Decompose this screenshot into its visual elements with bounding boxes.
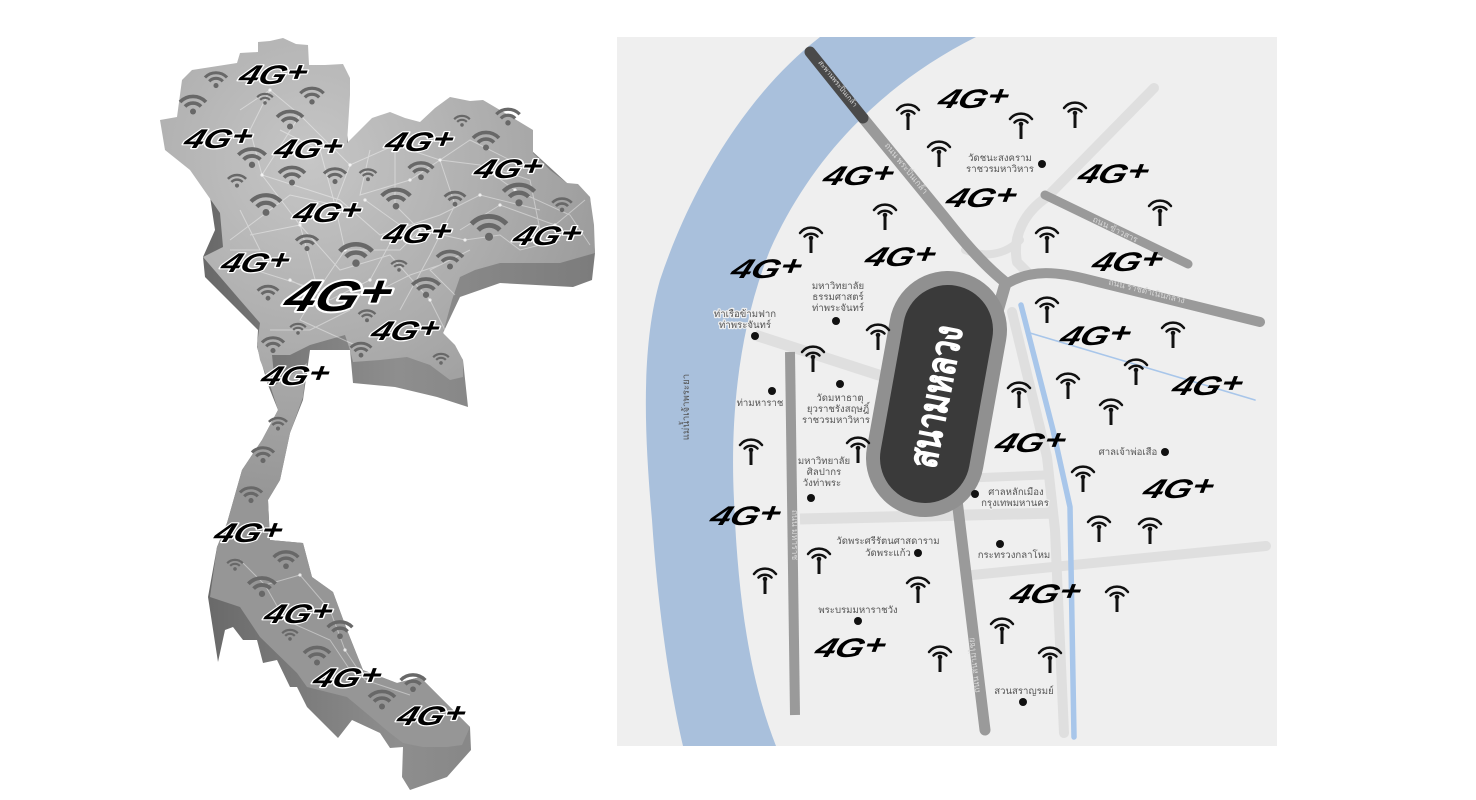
- 4G+ logos on street map: 4G: [706, 500, 765, 531]
- place labels: ศิลปากร: [807, 467, 841, 478]
- field label: สนามหลวง: [901, 322, 972, 471]
- 4G+ logos on street map: +: [1039, 424, 1072, 455]
- 4G+ logos on street map: 4G: [727, 253, 786, 284]
- 4G+ logos on map: +: [428, 124, 460, 154]
- 4G+ logos on map: 4G: [309, 663, 366, 693]
- panel: Sanam Luang street map: [617, 37, 1277, 746]
- 4G+ logos on street map: 4G: [934, 83, 993, 114]
- 4G+ logos on map: +: [282, 57, 314, 87]
- place labels: ราชวรมหาวิหาร: [802, 415, 870, 426]
- 4G+ logos on map: 4G: [393, 701, 450, 731]
- 4G+ logos on street map: +: [1136, 243, 1169, 274]
- 4G+ logos on street map: +: [982, 80, 1015, 111]
- 4G+ logos on street map: +: [1122, 155, 1155, 186]
- 4G+ logos on street map: 4G: [1139, 473, 1198, 504]
- 4G+ logos on street map: +: [1187, 470, 1220, 501]
- Sanam Luang field: [925, 330, 948, 458]
- 4G+ logos on map: +: [356, 660, 388, 690]
- minor roads: [755, 88, 1266, 733]
- 4G+ logos on street map: +: [775, 250, 808, 281]
- road labels: ถนน ข้าวสาร: [1091, 214, 1140, 245]
- road labels: ถนน พระปิ่นเกล้า: [883, 140, 931, 196]
- place labels: ศาลเจ้าพ่อเสือ: [1099, 446, 1157, 458]
- Chao Phraya river: [646, 37, 976, 746]
- wifi icons on map: [180, 73, 572, 709]
- 4G+ logos on map: +: [440, 698, 472, 728]
- 4G+ logos on map: 4G: [289, 198, 346, 228]
- 4G+ logos on map: +: [414, 313, 446, 343]
- 4G+ logos on map: +: [336, 195, 368, 225]
- place labels: มหาวิทยาลัย: [812, 281, 864, 292]
- 4G+ logos on street map: 4G: [811, 632, 870, 663]
- place labels: วัดชนะสงคราม: [968, 153, 1032, 164]
- place labels: สวนสราญรมย์: [994, 685, 1054, 697]
- 4G+ logos on street map: 4G: [819, 160, 878, 191]
- place labels: ธรรมศาสตร์: [812, 291, 864, 303]
- 4G+ logos on street map: +: [1216, 367, 1249, 398]
- 4G+ logos on map: +: [264, 245, 296, 275]
- panel: Thailand 3D map: [160, 38, 595, 790]
- antenna icons: [740, 103, 1184, 673]
- 4G+ logos on map: 4G: [235, 60, 292, 90]
- place labels: วัดมหาธาตุ: [816, 393, 864, 404]
- place labels: ยุวราชรังสฤษฎิ์: [807, 401, 871, 415]
- place labels: ท่าพระจันทร์: [719, 319, 771, 331]
- place labels: กระทรวงกลาโหม: [978, 549, 1050, 561]
- 4G+ logos on map: +: [257, 515, 289, 545]
- 4G+ logos on map: 4G: [470, 154, 527, 184]
- place labels: วัดพระแก้ว: [865, 548, 911, 559]
- 4G+ logos on map: +: [426, 216, 458, 246]
- road labels: ถนน ราชดำเนินกลาง: [1108, 277, 1186, 305]
- stadium outer ring: [925, 330, 948, 458]
- place labels: พระบรมมหาราชวัง: [818, 605, 898, 616]
- place labels: ท่าเรือข้ามฟาก: [714, 308, 776, 320]
- 4G+ logos on street map: 4G: [1168, 370, 1227, 401]
- 4G+ logos on map: 4G: [379, 219, 436, 249]
- road labels: [790, 58, 1186, 693]
- 4G+ logos on map: +: [556, 218, 588, 248]
- road labels: ถนน ราชดำเนินใน: [968, 389, 990, 459]
- 4G+ logos on map: 4G: [180, 124, 237, 154]
- road labels: สะพานพระปิ่นเกล้า: [816, 58, 860, 109]
- 4G+ logos on street map: +: [859, 629, 892, 660]
- location dots: [751, 160, 1169, 706]
- 4G+ logos on map: 4G: [381, 127, 438, 157]
- 4G+ logos on map: 4G: [260, 599, 317, 629]
- place labels: กรุงเทพมหานคร: [981, 498, 1049, 509]
- 4G+ logos on map: [179, 57, 588, 731]
- 4G+ logos on map: 4G: [257, 361, 314, 391]
- 4G+ logos on map: +: [227, 121, 259, 151]
- Pinklao bridge: [810, 52, 863, 118]
- 4G+ logos on map: 4G: [278, 272, 368, 320]
- place labels: วังท่าพระ: [803, 478, 841, 489]
- 4G+ logos on street map: +: [990, 179, 1023, 210]
- 4G+ logos on street map: 4G: [942, 182, 1001, 213]
- place labels: ศาลหลักเมือง: [988, 486, 1044, 498]
- map side walls: [200, 80, 595, 790]
- 4G+ logos on street map: [705, 80, 1249, 663]
- 4G+ logos on street map: +: [867, 157, 900, 188]
- 4G+ logos on street map: +: [1104, 317, 1137, 348]
- 4G+ logos on map: +: [304, 358, 336, 388]
- 4G+ logos on street map: 4G: [861, 241, 920, 272]
- 4G+ logos on street map: +: [1054, 575, 1087, 606]
- place labels: วัดพระศรีรัตนศาสดาราม: [836, 535, 940, 547]
- network lines: [230, 90, 590, 695]
- 4G+ logos on map: 4G: [367, 316, 424, 346]
- map background: [617, 37, 1277, 746]
- place labels: ราชวรมหาวิหาร: [966, 164, 1034, 175]
- network nodes: [260, 88, 557, 652]
- 4G+ logos on map: 4G: [217, 248, 274, 278]
- 4G+ logos on street map: 4G: [1074, 158, 1133, 189]
- place labels: ท่ามหาราช: [737, 398, 784, 409]
- 4G+ logos on street map: 4G: [1088, 246, 1147, 277]
- 4G+ logos on street map: +: [754, 497, 787, 528]
- place labels: ท่าพระจันทร์: [812, 302, 864, 314]
- blue canals: [1021, 305, 1255, 737]
- place labels: แม่น้ำเจ้าพระยา: [678, 374, 692, 440]
- 4G+ logos on map: +: [307, 596, 339, 626]
- road labels: ถนน สนามไชย: [966, 637, 982, 693]
- place labels: มหาวิทยาลัย: [798, 456, 850, 467]
- 4G+ logos on street map: 4G: [1006, 578, 1065, 609]
- 4G+ logos on map: 4G: [270, 134, 327, 164]
- 4G+ logos on map: +: [317, 131, 349, 161]
- major roads: [790, 118, 1260, 730]
- 4G+ logos on map: 4G: [210, 518, 267, 548]
- road labels: ถนน มหาราช: [790, 510, 800, 560]
- 4G+ logos on map: +: [352, 267, 401, 316]
- 4G+ logos on street map: +: [909, 238, 942, 269]
- 4G+ logos on street map: 4G: [1056, 320, 1115, 351]
- place labels: [678, 153, 1157, 697]
- 4G+ logos on map: 4G: [509, 221, 566, 251]
- 4G+ logos on street map: 4G: [991, 427, 1050, 458]
- map top surface: [160, 38, 595, 747]
- 4G+ logos on map: +: [517, 151, 549, 181]
